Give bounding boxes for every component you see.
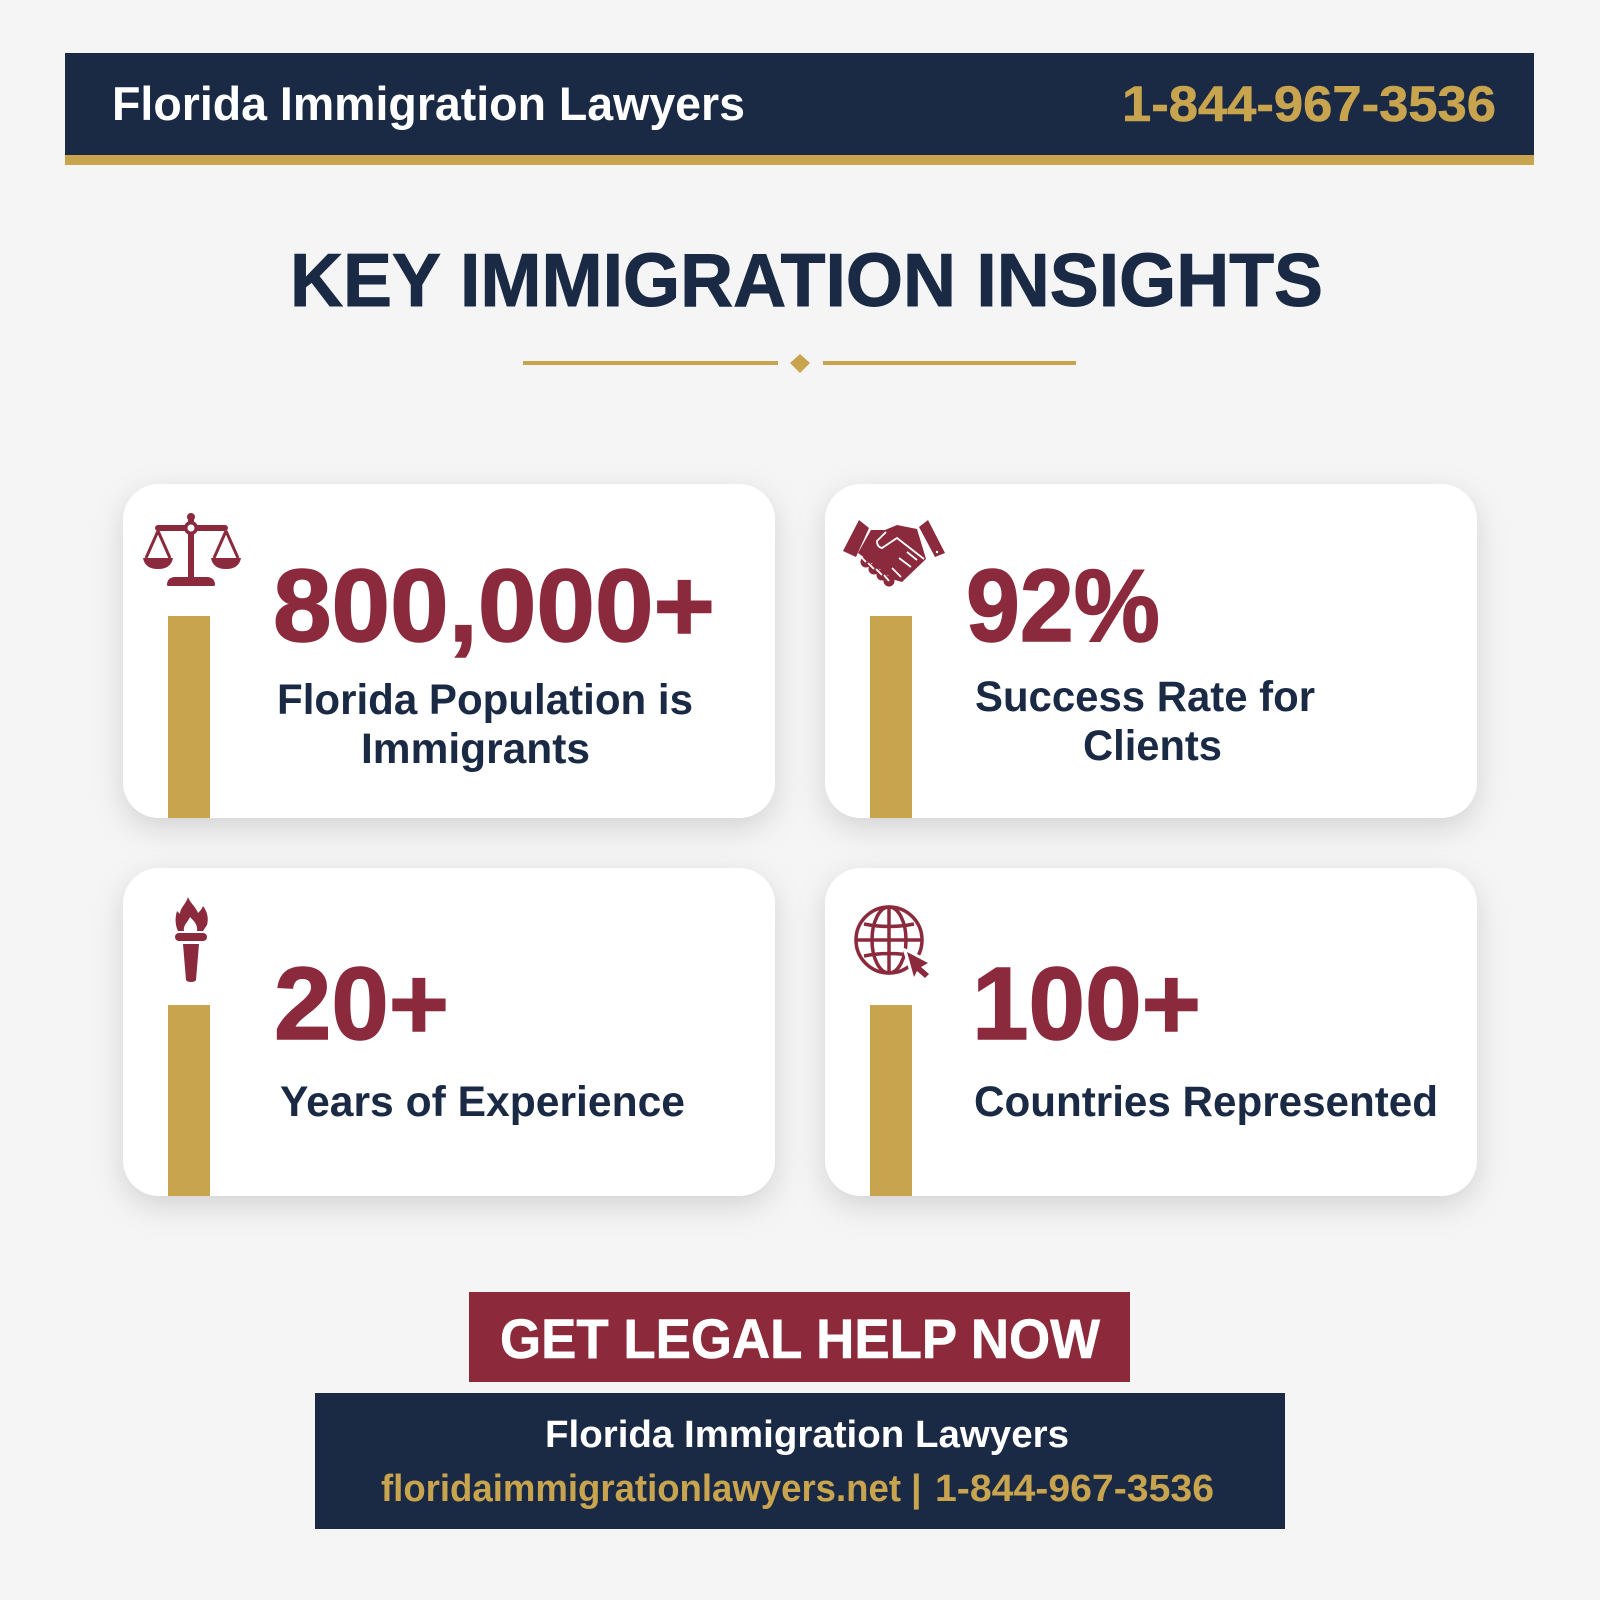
header firm name: Florida Immigration Lawyers — [112, 77, 745, 130]
header banner — [65, 53, 1534, 165]
footer contact box — [315, 1393, 1285, 1529]
panel: success rate — [825, 484, 1477, 818]
footer website and phone — [381, 1468, 1214, 1510]
gold bar — [870, 1005, 912, 1196]
stat label: Florida Population is — [277, 676, 693, 724]
header phone number: 1-844-967-3536 — [1122, 76, 1496, 132]
call to action button: GET LEGAL HELP NOW — [500, 1307, 1100, 1370]
footer website and phone: 1-844-967-3536 — [935, 1468, 1214, 1510]
gold bar — [168, 1005, 210, 1196]
icon: scales of justice — [143, 513, 241, 586]
gold bar — [168, 616, 210, 818]
icon: handshake — [843, 520, 945, 586]
footer website and phone: | — [911, 1468, 922, 1510]
stat value: 92% — [966, 548, 1160, 663]
title: KEY IMMIGRATION INSIGHTS — [290, 238, 1323, 322]
gold bar — [870, 616, 912, 818]
title divider with diamond — [523, 354, 1076, 373]
footer website and phone: floridaimmigrationlawyers.net — [381, 1468, 901, 1510]
stat label: Immigrants — [361, 725, 590, 773]
stat label — [975, 673, 1315, 770]
call to action button — [469, 1292, 1130, 1382]
stat label — [277, 676, 693, 773]
stat label: Countries Represented — [974, 1078, 1438, 1126]
stat value: 800,000+ — [273, 548, 715, 663]
stat label: Success Rate for — [975, 673, 1315, 721]
stat value: 20+ — [274, 946, 449, 1061]
stat label: Clients — [1083, 722, 1222, 770]
stat label: Years of Experience — [280, 1078, 685, 1126]
panel: countries represented — [825, 868, 1477, 1196]
stat value: 100+ — [972, 946, 1201, 1061]
footer firm name: Florida Immigration Lawyers — [545, 1414, 1069, 1456]
icon: torch — [175, 897, 208, 982]
icon: globe with cursor — [856, 907, 934, 983]
panel: florida population — [123, 484, 775, 818]
panel: years of experience — [123, 868, 775, 1196]
